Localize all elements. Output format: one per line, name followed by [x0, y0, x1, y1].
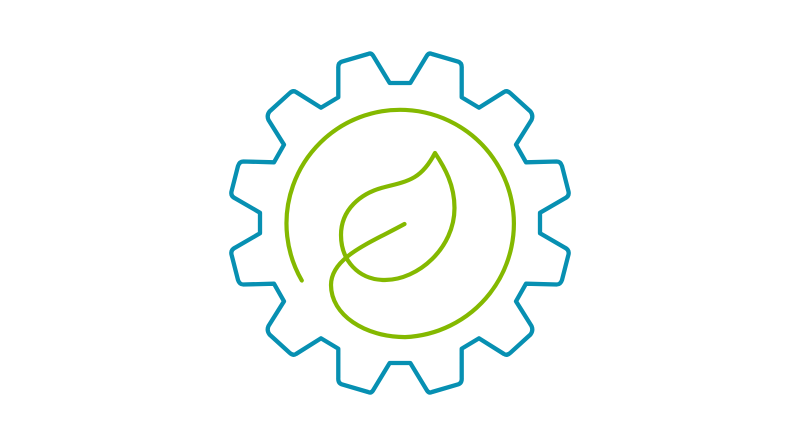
icon: green circle flowing into leaf stem [286, 110, 514, 337]
icon: green leaf outline [341, 153, 454, 280]
icon: blue gear outline [231, 54, 569, 392]
